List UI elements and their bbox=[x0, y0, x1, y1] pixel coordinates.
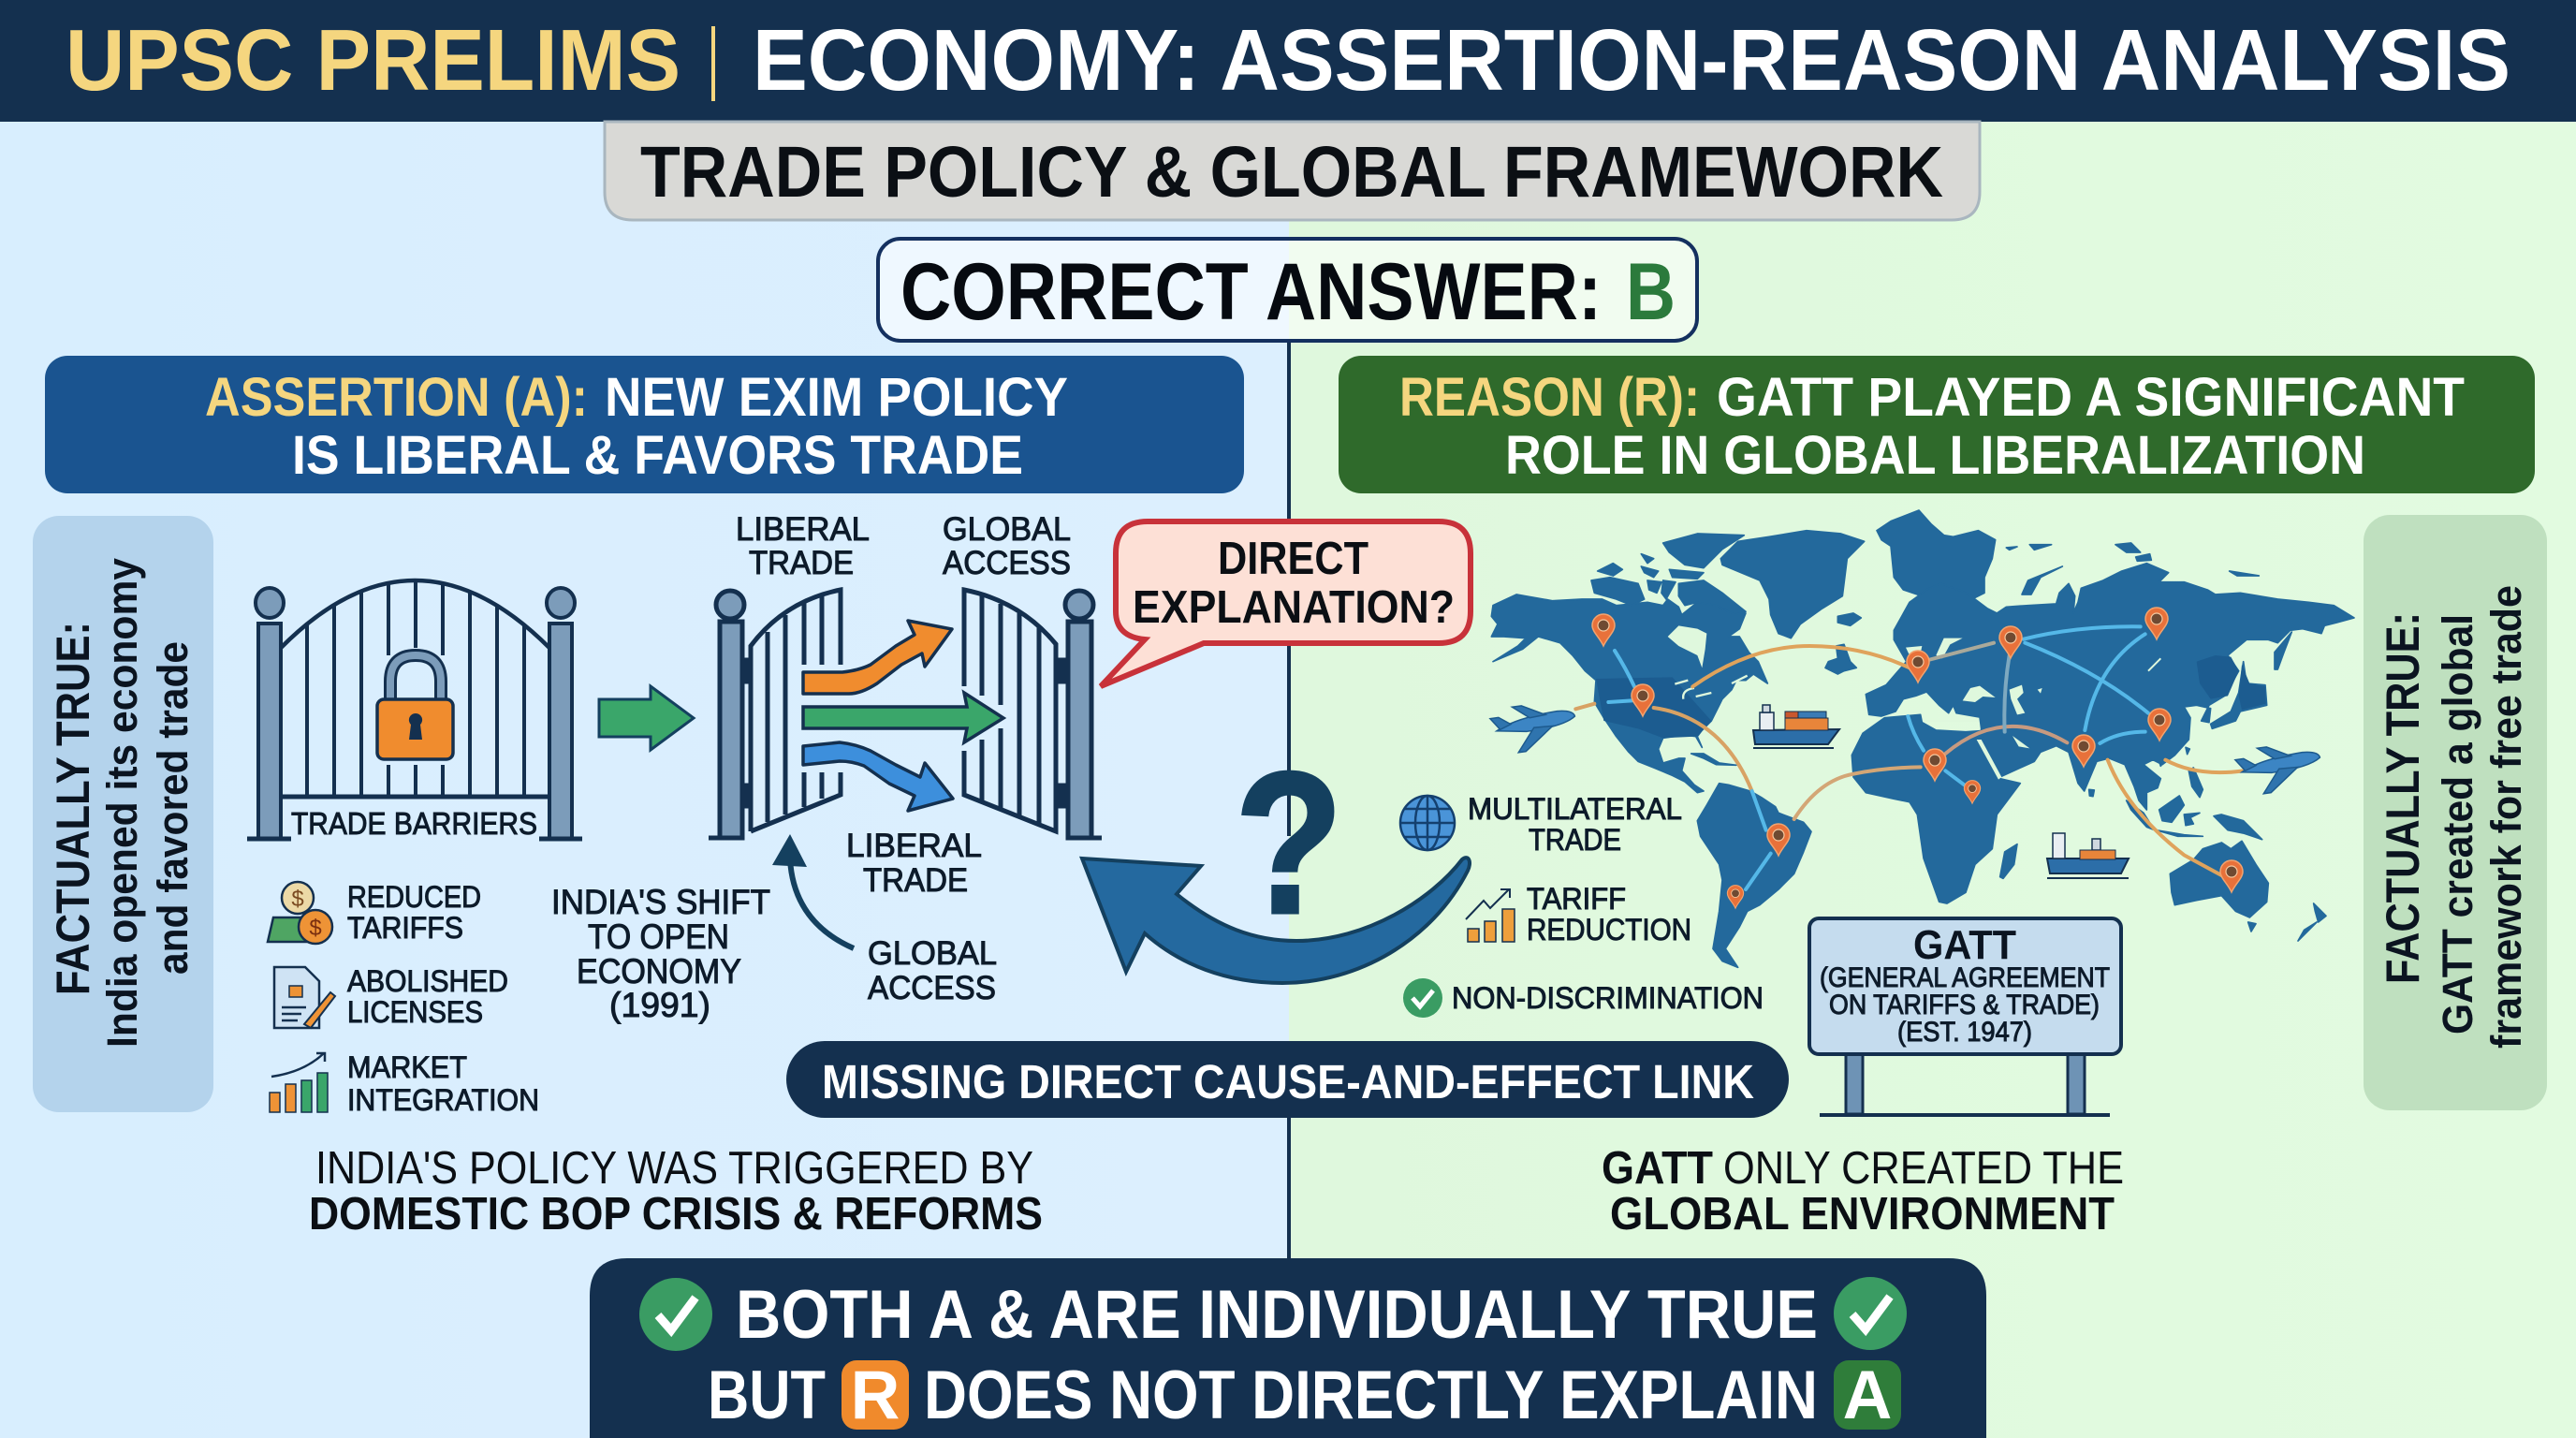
icon: money bbox=[268, 882, 332, 944]
assertion header bbox=[45, 356, 1244, 493]
correct answer box: B bbox=[1626, 247, 1676, 337]
icon: money: $ bbox=[291, 887, 304, 912]
label: trade barriers: TRADE BARRIERS bbox=[291, 806, 537, 841]
correct answer box: CORRECT ANSWER: bbox=[900, 247, 1602, 337]
text: India's shift: ECONOMY bbox=[577, 952, 741, 990]
text: market integration bbox=[347, 1050, 539, 1117]
GATT sign: (GENERAL AGREEMENT bbox=[1820, 962, 2110, 993]
text: market integration: INTEGRATION bbox=[347, 1083, 539, 1117]
gate labels: GLOBAL bbox=[868, 935, 997, 972]
gate labels: ACCESS bbox=[868, 970, 996, 1006]
list: GATT principles bbox=[1400, 792, 1764, 1018]
GATT sign: ON TARIFFS & TRADE) bbox=[1829, 990, 2100, 1020]
assertion header: ASSERTION (A): bbox=[205, 367, 588, 428]
land: Europe Asia Africa Oceania bbox=[1825, 510, 2354, 941]
text: abolished licenses: ABOLISHED bbox=[347, 964, 508, 998]
badge: A: A bbox=[1843, 1357, 1892, 1433]
trade routes bbox=[1575, 626, 2244, 889]
GATT sign: (EST. 1947) bbox=[1897, 1017, 2032, 1048]
speech bubble: DIRECT bbox=[1218, 534, 1368, 584]
caption left bbox=[309, 1143, 1043, 1240]
icon: check left bbox=[639, 1278, 712, 1351]
missing link pill bbox=[786, 1041, 1789, 1118]
gate labels: LIBERAL bbox=[846, 828, 982, 864]
reason header: REASON (R): bbox=[1399, 367, 1700, 428]
text: but: BUT bbox=[708, 1357, 826, 1433]
title bar bbox=[0, 0, 2576, 122]
panel: factually true left: FACTUALLY TRUE: bbox=[47, 622, 99, 995]
icon: cargo ship atlantic bbox=[1753, 705, 1839, 748]
panel: factually true right: framework for free trade bbox=[2482, 585, 2530, 1049]
text: does not explain: DOES NOT DIRECTLY EXPLAIN bbox=[924, 1357, 1818, 1433]
icon: money: $ bbox=[309, 916, 322, 941]
gate labels: ACCESS bbox=[943, 545, 1071, 581]
icon: license document bbox=[274, 967, 335, 1028]
icon: padlock bbox=[377, 655, 453, 759]
text: non-discrimination: NON-DISCRIMINATION bbox=[1452, 981, 1764, 1015]
assertion header: NEW EXIM POLICY bbox=[605, 367, 1068, 428]
reason header bbox=[1339, 356, 2535, 493]
arrow: global access to open gate bbox=[772, 834, 854, 948]
big curved arrow bbox=[1082, 858, 1470, 983]
text: multilateral trade: TRADE bbox=[1529, 823, 1621, 857]
title separator bbox=[711, 26, 715, 101]
text: India's shift: TO OPEN bbox=[588, 917, 729, 956]
text: abolished licenses bbox=[347, 964, 508, 1029]
caption right: ONLY CREATED THE bbox=[1723, 1143, 2124, 1194]
icon: plane east bbox=[2234, 740, 2324, 797]
GATT sign bbox=[1809, 918, 2121, 1115]
caption left: INDIA'S POLICY WAS TRIGGERED BY bbox=[315, 1143, 1033, 1194]
arrow: green trade flow bbox=[803, 693, 1003, 742]
closed gate bbox=[247, 580, 582, 841]
text: India's shift: INDIA'S SHIFT bbox=[551, 883, 770, 921]
panel: factually true right: FACTUALLY TRUE: bbox=[2377, 612, 2429, 984]
world map bbox=[1489, 510, 2354, 967]
text: tariff reduction bbox=[1527, 882, 1691, 946]
title: UPSC Prelims: UPSC PRELIMS bbox=[66, 11, 681, 109]
icon: globe bbox=[1400, 796, 1455, 850]
text: market integration: MARKET bbox=[347, 1050, 467, 1084]
gate labels: TRADE bbox=[749, 545, 854, 581]
text: tariff reduction: TARIFF bbox=[1527, 882, 1626, 916]
text: India's shift bbox=[551, 883, 770, 1024]
right gate leaf bbox=[964, 590, 1102, 838]
icon: check right bbox=[1834, 1277, 1907, 1350]
text: tariff reduction: REDUCTION bbox=[1527, 913, 1691, 946]
badge: R: R bbox=[851, 1357, 900, 1433]
conclusion panel bbox=[590, 1258, 1986, 1438]
gate labels bbox=[736, 511, 1071, 1006]
gate labels: GLOBAL bbox=[943, 511, 1071, 548]
panel: factually true left: India opened its economy bbox=[98, 558, 146, 1048]
gate labels: LIBERAL bbox=[736, 511, 870, 548]
text: India's shift: (1991) bbox=[609, 986, 710, 1024]
panel: factually true right bbox=[2364, 515, 2547, 1110]
arrow: orange trade flow bbox=[803, 621, 952, 694]
left gate leaf bbox=[709, 590, 841, 838]
open gate bbox=[709, 590, 1102, 838]
text: reduced tariffs: REDUCED bbox=[347, 880, 481, 914]
panel: factually true left: and favored trade bbox=[149, 641, 197, 975]
question mark: ? bbox=[1235, 731, 1343, 957]
icon: market bars bbox=[270, 1053, 328, 1112]
caption right: GLOBAL ENVIRONMENT bbox=[1610, 1189, 2115, 1240]
caption right: GATT bbox=[1602, 1143, 1713, 1194]
icon: plane west bbox=[1489, 698, 1579, 756]
text: both true: BOTH A & ARE INDIVIDUALLY TRUE bbox=[736, 1277, 1818, 1353]
speech bubble bbox=[1101, 521, 1471, 686]
background: right green half bbox=[1289, 122, 2576, 1438]
assertion header: IS LIBERAL & FAVORS TRADE bbox=[292, 425, 1023, 486]
list: left policy measures bbox=[268, 880, 539, 1117]
background: left blue half bbox=[0, 122, 1289, 1438]
speech bubble: EXPLANATION? bbox=[1133, 582, 1455, 633]
GATT sign: GATT bbox=[1913, 922, 2016, 968]
icon: check bbox=[1403, 978, 1442, 1018]
panel: factually true right: GATT created a global bbox=[2434, 614, 2481, 1034]
arrow: blue trade flow bbox=[803, 742, 953, 811]
icon: tariff bars bbox=[1466, 889, 1515, 942]
text: reduced tariffs bbox=[347, 880, 481, 945]
icon: cargo ship indian ocean bbox=[2047, 833, 2129, 878]
reason header: GATT PLAYED A SIGNIFICANT bbox=[1717, 367, 2465, 428]
caption right bbox=[1602, 1143, 2124, 1240]
text: abolished licenses: LICENSES bbox=[347, 995, 483, 1029]
gate labels: TRADE bbox=[863, 862, 968, 899]
missing link pill: MISSING DIRECT CAUSE-AND-EFFECT LINK bbox=[822, 1055, 1754, 1108]
location pins bbox=[1592, 608, 2243, 908]
caption left: DOMESTIC BOP CRISIS & REFORMS bbox=[309, 1189, 1043, 1240]
text: multilateral trade bbox=[1468, 792, 1682, 857]
arrow: shift to open bbox=[599, 686, 694, 750]
title: Economy analysis: ECONOMY: ASSERTION-REASON ANALYSIS bbox=[753, 11, 2510, 109]
text: reduced tariffs: TARIFFS bbox=[347, 911, 463, 945]
panel: factually true left bbox=[33, 516, 213, 1112]
land: Americas bbox=[1491, 531, 1865, 967]
subtitle panel: TRADE POLICY & GLOBAL FRAMEWORK bbox=[640, 132, 1943, 213]
reason header: ROLE IN GLOBAL LIBERALIZATION bbox=[1505, 425, 2365, 486]
text: multilateral trade: MULTILATERAL bbox=[1468, 792, 1682, 826]
